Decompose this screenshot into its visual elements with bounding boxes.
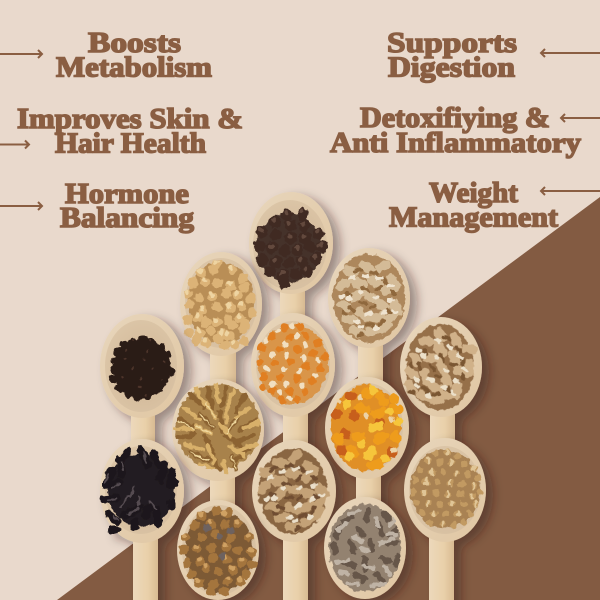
benefit: Supports Digestion: Supports (387, 27, 517, 59)
benefit: Weight Management: Management (389, 202, 558, 234)
spoon: black peppercorns (100, 314, 184, 465)
benefit: Improves Skin & Hair Health (17, 103, 243, 160)
benefit: Improves Skin & Hair Health: Improves Skin & (17, 103, 243, 135)
benefit: Boosts Metabolism (56, 27, 212, 84)
benefit: Boosts Metabolism: Metabolism (56, 52, 212, 84)
arrow: Detoxifying (561, 114, 600, 122)
spoon: flakes right (366, 292, 514, 455)
spoon: allspice berries (249, 192, 333, 330)
spoon: flakes centre (231, 426, 355, 600)
benefit: Detoxifiying & Anti Inflammatory (330, 102, 582, 159)
benefit: Supports Digestion: Digestion (388, 52, 515, 84)
benefit: Supports Digestion (387, 27, 517, 84)
spoon: popcorn corn kernels (251, 313, 335, 455)
arrow: Boosts Metabolism (0, 50, 42, 58)
spoon: orange corn (325, 377, 409, 518)
benefit: Boosts Metabolism: Boosts (88, 27, 181, 59)
spoon: mixed brown nuts (177, 500, 259, 600)
benefit: Weight Management: Weight (429, 177, 518, 209)
arrow: Weight Management (541, 187, 600, 195)
spoon: black sunflower seeds (100, 439, 184, 600)
spoon: soybeans (180, 252, 262, 395)
spoon: sunflower kernels (324, 497, 406, 599)
benefit: Detoxifiying & Anti Inflammatory: Anti Inflammatory (330, 127, 582, 159)
spoon: oat grains (172, 379, 264, 520)
arrow: Supports Digestion (541, 49, 600, 57)
benefit: Improves Skin & Hair Health: Hair Health (55, 128, 206, 160)
benefit: Hormone Balancing (60, 178, 195, 234)
benefit: Detoxifiying & Anti Inflammatory: Detoxifiying & (360, 102, 550, 134)
arrow: Improves Skin (0, 140, 29, 148)
arrow: Hormone Balancing (0, 202, 42, 210)
background: brown diagonal triangle (57, 197, 600, 600)
spoon: rolled oats top (328, 248, 410, 388)
spoon: wheat (404, 438, 486, 600)
benefit: Hormone Balancing: Balancing (60, 202, 195, 234)
benefit: Weight Management (389, 177, 558, 234)
benefit: Hormone Balancing: Hormone (65, 178, 189, 210)
